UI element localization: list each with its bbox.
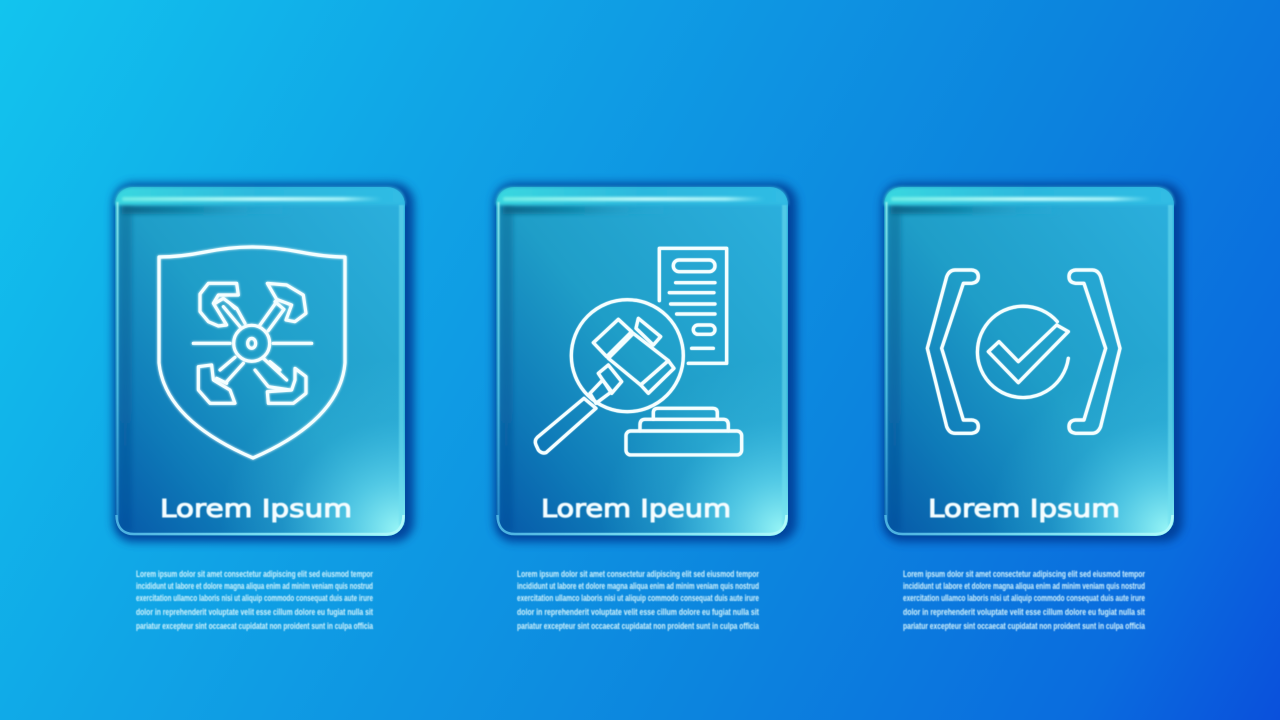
text block: card 3 description: exercitation ullamco laboris nisi ut aliquip commodo consequat duis aute irure	[903, 593, 1145, 604]
text block: card 1 description: pariatur excepteur sint occaecat cupidatat non proident sunt in culpa officia	[136, 621, 373, 632]
text block: card 2 description: Lorem ipsum dolor sit amet consectetur adipiscing elit sed eiusmod tempor	[517, 569, 759, 580]
text block: card 3 description: dolor in reprehenderit voluptate velit esse cillum dolore eu fugiat nulla sit	[903, 607, 1146, 618]
text block: card 2 description: incididunt ut labore et dolore magna aliqua enim ad minim veniam quis nostrud	[517, 581, 759, 592]
panel: card 1	[113, 183, 414, 542]
icon: check mark in brackets	[927, 270, 1120, 433]
heading: card 2 title: Lorem Ipeum	[541, 494, 731, 523]
text block: card 2 description	[517, 569, 760, 632]
icon: gavel under magnifier with document	[535, 248, 742, 455]
text block: card 1 description: exercitation ullamco laboris nisi ut aliquip commodo consequat duis aute irure	[136, 593, 373, 604]
icon: shield with drone	[159, 247, 345, 458]
text block: card 3 description: Lorem ipsum dolor sit amet consectetur adipiscing elit sed eiusmod tempor	[903, 569, 1145, 580]
text block: card 3 description	[903, 569, 1146, 632]
text block: card 1 description: dolor in reprehenderit voluptate velit esse cillum dolore eu fugiat nulla sit	[136, 607, 374, 618]
text block: card 3 description: pariatur excepteur sint occaecat cupidatat non proident sunt in culpa officia	[903, 621, 1146, 632]
text block: card 1 description: incididunt ut labore et dolore magna aliqua enim ad minim veniam quis nostrud	[136, 581, 373, 592]
heading: card 1 title: Lorem Ipsum	[160, 494, 352, 523]
text block: card 3 description: incididunt ut labore et dolore magna aliqua enim ad minim veniam quis nostrud	[903, 581, 1145, 592]
text block: card 2 description: pariatur excepteur sint occaecat cupidatat non proident sunt in culpa officia	[517, 621, 760, 632]
text block: card 1 description	[136, 569, 374, 632]
text block: card 2 description: dolor in reprehenderit voluptate velit esse cillum dolore eu fugiat nulla sit	[517, 607, 760, 618]
panel: card 3	[882, 183, 1183, 542]
icon: drone	[193, 283, 312, 403]
heading: card 3 title: Lorem Ipsum	[928, 494, 1120, 523]
text block: card 1 description: Lorem ipsum dolor sit amet consectetur adipiscing elit sed eiusmod tempor	[136, 569, 373, 580]
panel: card 2	[494, 183, 797, 542]
text block: card 2 description: exercitation ullamco laboris nisi ut aliquip commodo consequat duis aute irure	[517, 593, 759, 604]
